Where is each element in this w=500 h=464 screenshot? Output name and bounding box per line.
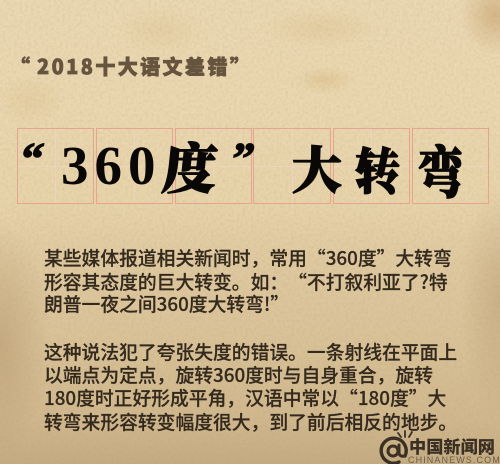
watermark logo: China News: [379, 430, 500, 464]
box 3: [175, 128, 252, 204]
logo text: Chinese name: 中国新闻网: [409, 433, 495, 458]
box 6: [412, 128, 489, 204]
box 2: [96, 128, 173, 204]
number 360: 360: [61, 135, 162, 196]
text block: second paragraph: 以端点为定点，旋转360度时与自身重合，旋转: [44, 361, 433, 388]
text block: first paragraph: 朗普一夜之间360度大转弯!”: [44, 290, 289, 317]
character: da: 大: [292, 131, 342, 203]
text block: second paragraph: 转弯来形容转变幅度很大，到了前后相反的地步。: [44, 408, 457, 435]
text block: first paragraph: [44, 244, 452, 317]
closing quote: ”: [229, 134, 258, 183]
box 4: [253, 128, 331, 204]
heading: series title: “: [10, 51, 30, 80]
character: wan: 弯: [418, 129, 463, 208]
text block: first paragraph: 形容其态度的巨大转变。如：“不打叙利亚了?特: [44, 268, 448, 295]
character: du: 度: [159, 127, 221, 204]
icon: at sign with rays: [379, 430, 413, 464]
heading: series title: 2018十大语文差错: [37, 51, 230, 80]
text block: second paragraph: [44, 338, 457, 435]
title grid: six writing boxes with calligraphic title: [17, 127, 489, 208]
box 5: [333, 128, 410, 204]
text block: second paragraph: 这种说法犯了夸张失度的错误。一条射线在平面上: [44, 338, 457, 365]
box 1: [17, 128, 94, 204]
opening quote: “: [18, 134, 47, 183]
character: zhuan: 转: [355, 132, 400, 203]
text block: first paragraph: 某些媒体报道相关新闻时，常用“360度”大转弯: [44, 244, 452, 271]
heading: series title: ”: [230, 51, 250, 80]
text block: second paragraph: 180度时正好形成平角，汉语中常以“180度”大: [44, 384, 446, 411]
